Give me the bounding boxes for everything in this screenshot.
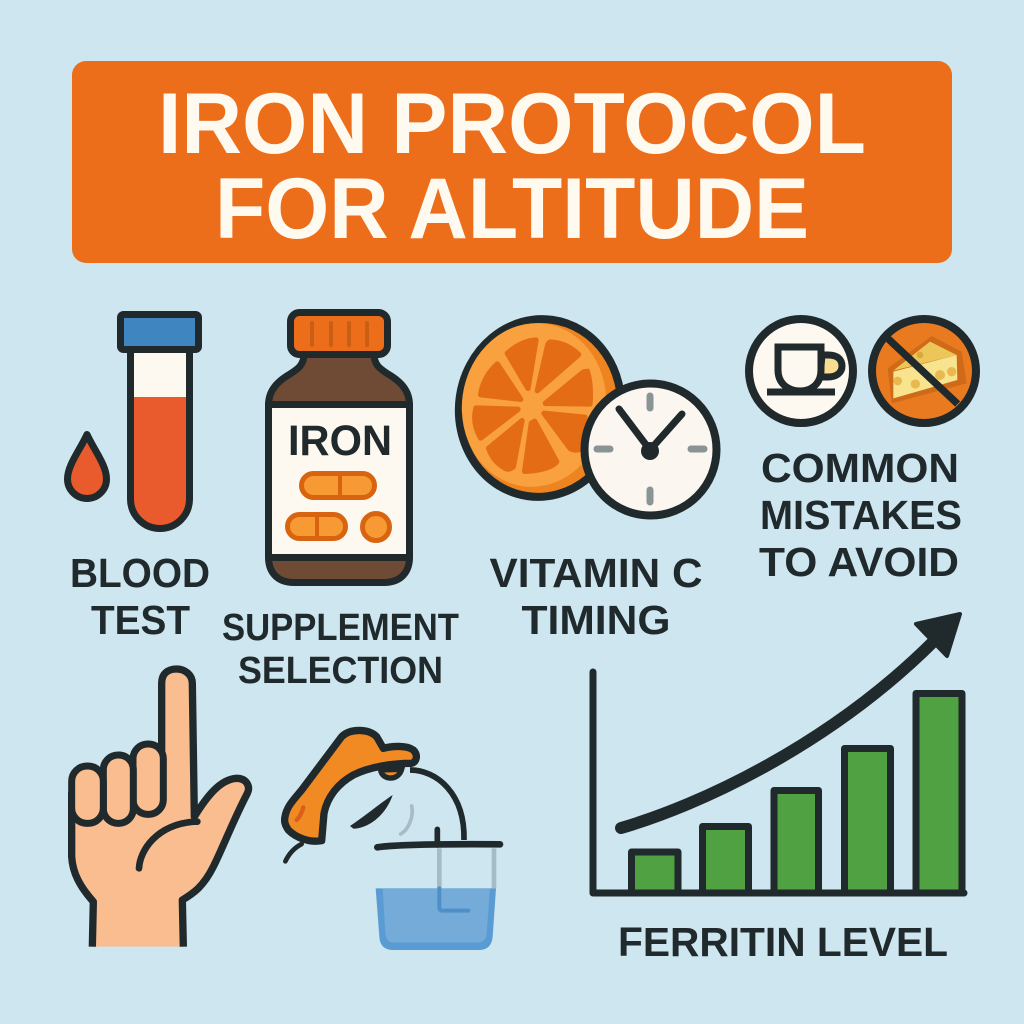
title banner: IRON PROTOCOL: [158, 76, 866, 172]
icon: orange slice: [447, 309, 633, 507]
chart: ferritin level bars: [593, 614, 964, 893]
label: vitamin c timing: VITAMIN C: [490, 550, 702, 596]
icon: no cheese: [872, 319, 976, 423]
label: ferritin level: FERRITIN LEVEL: [618, 919, 948, 965]
label: common mistakes to avoid: COMMON: [761, 445, 959, 491]
label: vitamin c timing: [490, 550, 702, 643]
icon: iron supplement bottle: IRON: [288, 417, 392, 465]
label: vitamin c timing: TIMING: [522, 597, 670, 643]
title banner: FOR ALTITUDE: [215, 161, 809, 257]
label: blood test: BLOOD: [70, 550, 210, 596]
arrow: rising trend: [621, 614, 960, 828]
label: common mistakes to avoid: MISTAKES: [760, 492, 962, 538]
icon: blood test tube and drop: [68, 314, 198, 528]
label: blood test: [70, 550, 210, 643]
icon: coffee cup: [749, 319, 853, 423]
icon: hand pointing up: [72, 669, 248, 947]
icon: clock: [584, 384, 716, 516]
label: common mistakes to avoid: [759, 445, 962, 585]
label: supplement selection: [222, 607, 459, 692]
icon: glass of water with orange packet: [285, 730, 500, 950]
label: supplement selection: SELECTION: [238, 650, 443, 692]
label: blood test: TEST: [91, 597, 190, 643]
label: common mistakes to avoid: TO AVOID: [759, 539, 959, 585]
label: supplement selection: SUPPLEMENT: [222, 607, 459, 649]
title banner: [72, 61, 952, 263]
icon: iron supplement bottle: [268, 312, 410, 582]
